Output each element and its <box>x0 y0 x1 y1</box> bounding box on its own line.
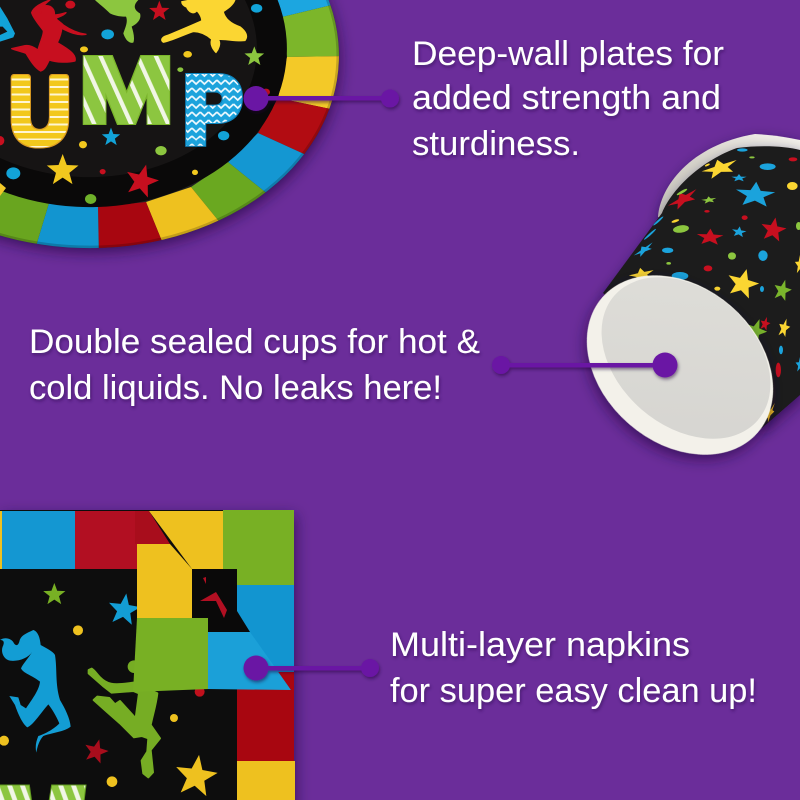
plate letters: P <box>184 58 242 163</box>
text: plates: added strength and <box>412 79 721 117</box>
text: napkins <box>390 626 757 710</box>
text: plates: Deep-wall plates for <box>412 35 724 73</box>
text: cups <box>29 323 480 407</box>
plate letters <box>10 40 242 163</box>
blue dancer <box>0 630 71 753</box>
cup stars <box>628 148 800 423</box>
cup bottom outer <box>551 239 800 491</box>
green dancer <box>95 0 140 43</box>
plate dots <box>0 1 270 204</box>
napkin artwork <box>0 583 220 800</box>
green dancer <box>89 661 160 777</box>
plate artwork <box>0 0 270 204</box>
yellow dancer <box>162 0 247 53</box>
napkin fold <box>133 544 294 692</box>
cup bottom inner <box>570 244 800 472</box>
text: napkins: Multi-layer napkins <box>390 626 690 664</box>
text: plates <box>412 35 724 163</box>
plate inner black <box>0 0 295 217</box>
plate stars <box>47 1 264 199</box>
napkin <box>0 510 295 800</box>
callout: cup <box>492 352 678 378</box>
callout: napkin <box>244 656 379 680</box>
cup body <box>603 146 800 428</box>
text: cups: cold liquids. No leaks here! <box>29 369 442 407</box>
cup back rim <box>658 134 800 220</box>
napkin dots <box>0 625 205 787</box>
callout: plate <box>244 86 399 111</box>
fold blue <box>208 632 291 690</box>
fold green <box>133 618 208 692</box>
napkin stars <box>43 583 220 797</box>
plate letters: U <box>10 57 70 163</box>
red dancer <box>12 0 86 71</box>
napkin letters <box>0 785 86 800</box>
cup <box>551 134 800 491</box>
text: napkins: for super easy clean up! <box>390 672 757 710</box>
fold window <box>192 569 250 632</box>
text: plates: sturdiness. <box>412 125 580 163</box>
text: cups: Double sealed cups for hot & <box>29 323 480 361</box>
napkin top band <box>0 510 294 585</box>
plate letters: M <box>80 40 173 141</box>
blue dancer <box>0 7 15 42</box>
plate <box>0 0 346 260</box>
napkin right band <box>237 585 295 800</box>
fold yellow <box>137 544 192 618</box>
plate rim stripes <box>0 0 345 260</box>
